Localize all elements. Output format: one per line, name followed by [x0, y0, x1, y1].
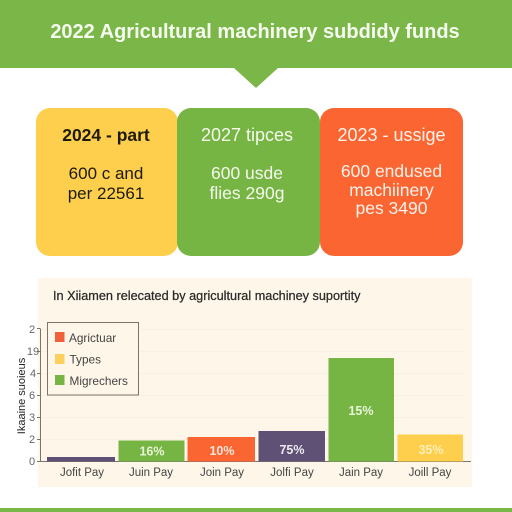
y axis title: Ikaaine suoieus [16, 357, 28, 434]
legend: Migrechers [70, 374, 128, 388]
y axis labels: 2 [29, 324, 35, 336]
bar 6 [398, 434, 463, 462]
x axis labels [60, 467, 452, 479]
y axis labels [27, 324, 39, 468]
x axis labels: Joill Pay [409, 467, 452, 479]
bar 4: 75% [279, 443, 305, 457]
x axis labels: Jofit Pay [60, 467, 104, 479]
bar chart [16, 322, 471, 479]
title: 2022 Agricultural machinery subdidy funds [50, 21, 460, 43]
bar 6: 35% [418, 443, 444, 457]
bar 5: 15% [348, 404, 374, 418]
chart heading: In Xiiamen relecated by agricultural machiney suportity [53, 289, 360, 303]
card text [210, 163, 284, 203]
header banner [0, 0, 512, 88]
bar 5 [328, 358, 394, 462]
panel: green card [177, 108, 320, 256]
bar 2 [118, 440, 184, 462]
card text: 600 usde [211, 163, 283, 183]
card text: pes 3490 [355, 198, 428, 218]
legend [48, 322, 138, 395]
panel: yellow card [36, 108, 178, 256]
card text: 600 c and [69, 164, 143, 183]
card text: 600 endused [341, 161, 442, 181]
panel: chart [38, 278, 472, 487]
y axis labels: 19 [27, 346, 39, 358]
legend: Agrictuar [69, 331, 116, 345]
card heading: 2027 tipces [201, 125, 293, 145]
card text: per 22561 [68, 184, 144, 203]
legend: Types [70, 352, 101, 366]
x axis labels: Jain Pay [339, 467, 383, 479]
card heading: 2024 - part [62, 125, 150, 145]
y axis labels: 0 [29, 456, 35, 468]
icon: banner pointer [234, 68, 278, 88]
footer band [0, 508, 512, 512]
bar 3: 10% [209, 444, 235, 458]
bar 2: 16% [139, 444, 165, 458]
card heading: 2023 - ussige [337, 125, 446, 145]
panel: orange card [320, 108, 463, 256]
card text: machiinery [349, 180, 434, 200]
axes [37, 328, 471, 462]
y axis labels: 2 [29, 434, 35, 446]
bar 3 [188, 437, 255, 462]
x axis labels: Juin Pay [129, 467, 173, 479]
x axis labels: Jolfi Pay [270, 467, 314, 479]
y axis labels: 3 [29, 412, 35, 424]
card text [68, 164, 144, 203]
card text [341, 161, 442, 218]
x axis labels: Join Pay [200, 467, 244, 479]
bar 1 [47, 457, 115, 462]
bar 4 [258, 431, 325, 462]
y axis labels: 4 [30, 368, 36, 380]
card text: flies 290g [210, 183, 284, 203]
y axis labels: 6 [29, 390, 35, 402]
